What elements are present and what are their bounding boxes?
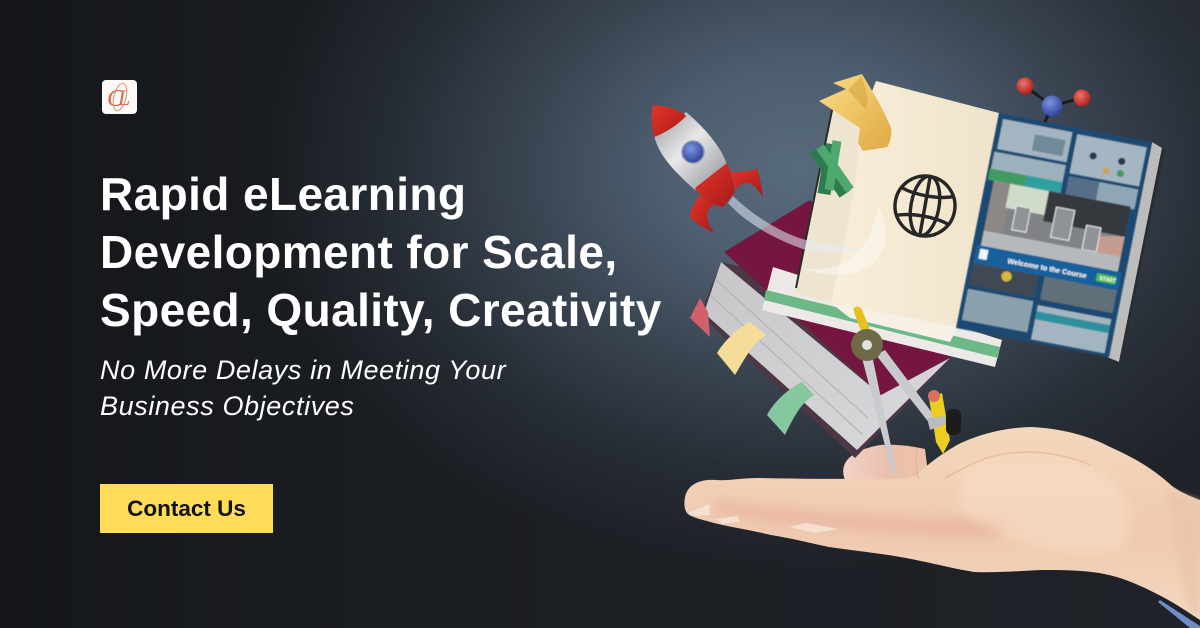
logo	[102, 80, 137, 114]
photo tablets	[1010, 200, 1103, 252]
title	[100, 168, 662, 336]
subtitle	[100, 355, 506, 421]
lower photo left	[969, 263, 1039, 297]
gray page block	[704, 262, 950, 450]
compass clamp	[927, 416, 946, 430]
lower card right	[1031, 305, 1111, 353]
open book	[762, 74, 1165, 367]
top left card	[997, 119, 1072, 162]
finger shading	[715, 500, 1010, 536]
rocket trail	[728, 196, 870, 251]
page spine shadow	[796, 110, 832, 288]
thumb crease	[916, 449, 1090, 479]
inner page	[795, 90, 880, 303]
title: Development for Scale,	[100, 226, 618, 278]
top right card	[1070, 134, 1147, 186]
subtitle: No More Delays in Meeting Your	[100, 355, 506, 385]
logo: L	[117, 85, 130, 110]
green band	[764, 290, 1000, 358]
page lines	[711, 280, 868, 434]
page base	[956, 113, 1152, 357]
lower cards	[962, 289, 1033, 332]
green letter X	[815, 141, 850, 194]
green sticky note	[767, 382, 814, 435]
diagram dots	[1086, 152, 1127, 178]
lower photo right	[1040, 276, 1117, 313]
right page edge	[1107, 142, 1162, 362]
welcome band: START	[1099, 276, 1117, 285]
maroon cover	[724, 200, 950, 395]
teal strip	[1025, 175, 1062, 193]
title: Rapid eLearning	[100, 168, 466, 220]
red tail	[695, 163, 735, 207]
pencil wheel	[946, 409, 961, 435]
photo	[981, 181, 1131, 272]
bottom cover	[700, 262, 952, 458]
subtitle: Business Objectives	[100, 391, 355, 421]
compass and pencil	[851, 306, 961, 476]
left fin	[690, 195, 714, 233]
hand	[684, 427, 1200, 628]
stack of books	[690, 200, 952, 458]
welcome band	[973, 245, 1122, 290]
palm and fingers	[684, 427, 1200, 620]
right leg	[876, 350, 936, 424]
nose cone	[652, 105, 686, 137]
pencil eraser	[928, 390, 940, 402]
contact button	[100, 484, 273, 533]
hub screw	[862, 340, 872, 350]
rocket	[652, 105, 870, 251]
yellow sticky note	[717, 322, 766, 375]
photo wall	[984, 181, 1012, 234]
photo desk	[981, 231, 1121, 272]
second card	[989, 152, 1066, 193]
right page dark edge	[1119, 148, 1165, 362]
palm highlight	[960, 458, 1130, 553]
green strip	[988, 168, 1027, 186]
card picture	[1032, 134, 1066, 156]
contact button: Contact Us	[127, 496, 246, 521]
rocket window	[682, 141, 704, 163]
right page content	[956, 113, 1152, 357]
left page	[831, 81, 999, 327]
photo light area	[1005, 184, 1051, 215]
page bottom	[831, 303, 958, 342]
right mid card	[1065, 176, 1138, 209]
photo dark area	[1043, 191, 1131, 237]
wrist shading	[1165, 490, 1200, 615]
logo: C	[107, 86, 124, 112]
globe icon	[890, 171, 960, 241]
silver body	[654, 112, 727, 190]
title: Speed, Quality, Creativity	[100, 284, 662, 336]
people picture	[1065, 176, 1100, 202]
lower photo icons	[1000, 270, 1013, 282]
thumb tip	[843, 445, 930, 490]
shirt cuff	[1158, 600, 1200, 628]
welcome band: Welcome to the Course	[1007, 256, 1088, 280]
molecule	[1016, 78, 1090, 122]
lower card band	[1035, 311, 1110, 333]
pencil	[929, 393, 950, 454]
compass handle	[854, 306, 871, 334]
yellow letter Y	[819, 74, 891, 151]
compass hub	[851, 329, 883, 361]
fingernails	[688, 504, 838, 533]
left leg	[862, 355, 896, 476]
photo hand	[1085, 230, 1125, 263]
red sticky note	[690, 298, 710, 337]
right fin	[729, 168, 763, 197]
swirl	[800, 205, 886, 275]
white sheet	[762, 267, 1002, 367]
